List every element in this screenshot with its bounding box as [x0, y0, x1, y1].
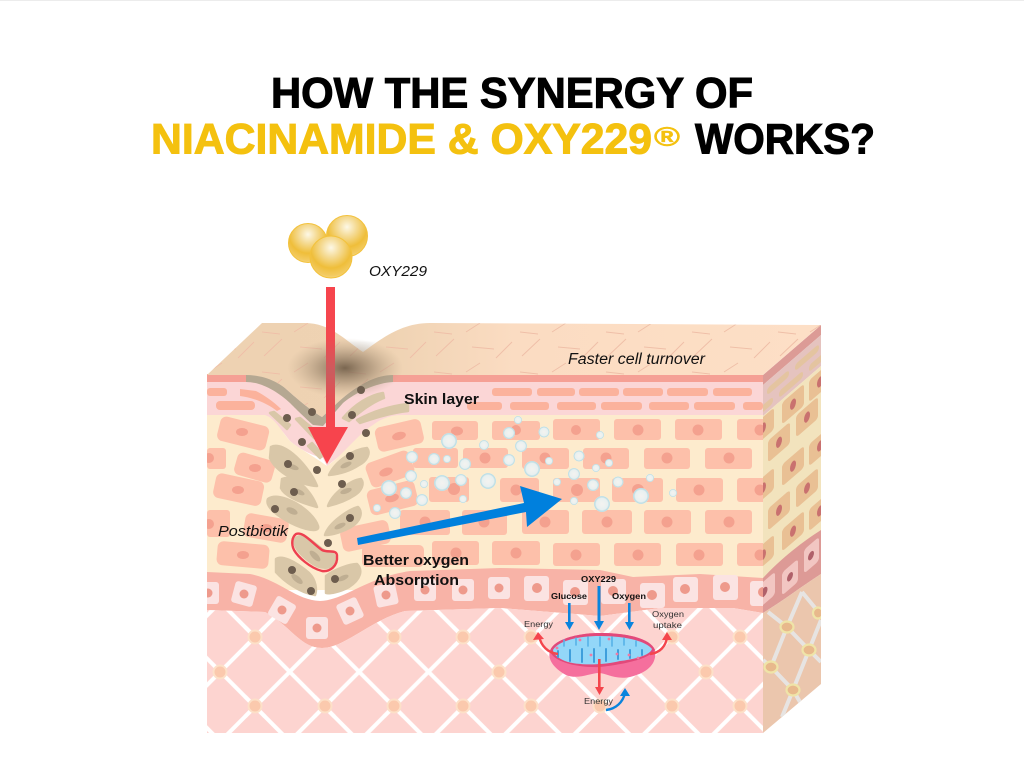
- Postbiotik label: Postbiotik: [218, 523, 290, 540]
- flat cells in pink layer: [207, 388, 763, 411]
- mitochondrion: [549, 633, 655, 678]
- side wall of block: [763, 325, 821, 733]
- title: NIACINAMIDE & OXY229: [151, 116, 652, 164]
- red arrow: OXY229 penetration: [308, 287, 348, 464]
- oxygen bubbles: [373, 416, 677, 519]
- Better oxygen Absorption label: Better oxygen: [363, 552, 469, 569]
- mitochondrion labels: Energy: [584, 696, 614, 706]
- cream cell layer: [207, 415, 763, 590]
- blue arrow: oxygen spreading: [357, 486, 562, 545]
- inner matrix: [553, 636, 652, 664]
- front layers: [197, 374, 784, 733]
- icon: OXY229 gold spheres: [288, 216, 368, 278]
- mitochondrion labels: uptake: [653, 620, 682, 630]
- Better oxygen Absorption label: Absorption: [374, 572, 459, 589]
- red energy arrows: [533, 632, 672, 695]
- mitochondrion labels: Energy: [524, 619, 554, 629]
- title: HOW THE SYNERGY OF: [271, 70, 753, 118]
- mitochondrion labels: Oxygen: [652, 609, 684, 619]
- top skin surface: [207, 323, 821, 417]
- Faster cell turnover label: Faster cell turnover: [568, 351, 706, 368]
- OXY229 label: OXY229: [369, 263, 428, 280]
- matrix dots: [556, 638, 639, 659]
- mitochondrion labels: [524, 575, 684, 706]
- pink skin layer: [207, 382, 763, 466]
- mitochondrion labels: Oxygen: [612, 592, 646, 601]
- basal band cells: [197, 575, 775, 639]
- lattice dermis: [207, 608, 763, 733]
- title: WORKS?: [695, 116, 875, 164]
- blue input arrows: [565, 586, 634, 630]
- title: [151, 70, 875, 164]
- outer membrane: [549, 633, 655, 678]
- melanin dots: [271, 386, 370, 595]
- mitochondrion labels: Glucose: [551, 592, 588, 601]
- surface stripe: [207, 374, 763, 382]
- blue recycle arrow: [606, 688, 630, 710]
- side lattice: [763, 592, 821, 717]
- tan pigment cells: [268, 393, 408, 595]
- skin block: [197, 316, 831, 749]
- pink basal band: [207, 568, 763, 648]
- lattice nodes: [214, 630, 746, 712]
- Better oxygen Absorption label: [363, 552, 469, 589]
- title: ®: [654, 122, 680, 152]
- postbiotik red outline: [292, 534, 337, 571]
- brick cells: [207, 415, 784, 569]
- mitochondrion labels: OXY229: [581, 575, 617, 584]
- cristae: [558, 637, 642, 662]
- Skin layer label: Skin layer: [404, 391, 479, 408]
